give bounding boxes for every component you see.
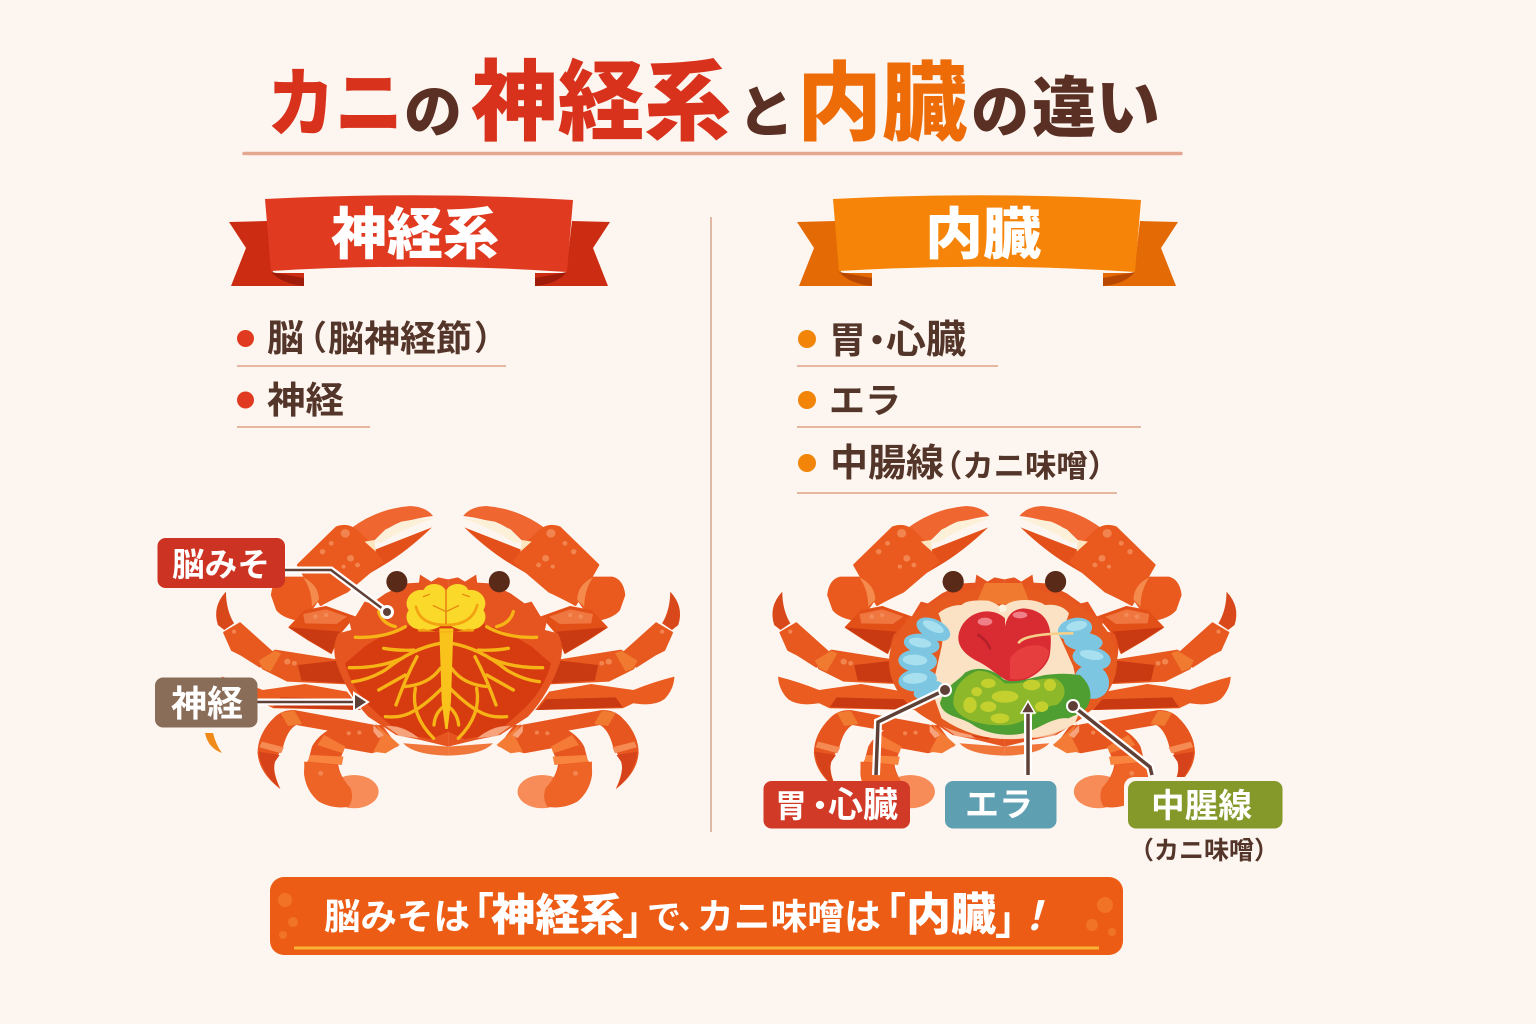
title: カニ: [267, 62, 403, 146]
bottom callout banner: 」: [622, 899, 662, 943]
list: internal organs: ・: [859, 320, 895, 361]
label: stomach and heart with leader: [764, 684, 951, 828]
panel heading: internal organs ribbon: 内臓: [925, 203, 1041, 266]
list: internal organs: （カニ味噌）: [931, 449, 1119, 484]
eyes: [943, 571, 1066, 592]
bottom callout banner: ！: [1014, 895, 1054, 939]
list: internal organs: 胃: [829, 320, 866, 361]
bottom callout banner: [270, 877, 1123, 955]
title underline: [244, 152, 1181, 155]
carapace rim: [889, 586, 1117, 738]
title: の: [971, 80, 1029, 145]
list: nervous system: 脳神経節: [328, 318, 472, 359]
label: nerves with arrow: 神経: [171, 683, 243, 724]
cream inner body: [932, 600, 1082, 739]
label: stomach and heart with leader: 胃: [775, 788, 807, 824]
bottom callout banner: 「: [866, 891, 906, 935]
brain: [412, 618, 480, 632]
list: internal organs: 心臓: [886, 319, 966, 362]
list: nervous system: 脳: [267, 318, 304, 359]
bottom callout banner: 「: [454, 891, 494, 935]
list: internal organs: [797, 319, 1141, 493]
list: nervous system: （: [293, 320, 327, 358]
label: brain miso with leader: [158, 538, 394, 619]
bottom callout banner: 神経系: [491, 891, 624, 940]
title: [267, 53, 1160, 152]
label: nerves with arrow: [155, 678, 368, 728]
panel heading: nervous system ribbon: 神経系: [331, 203, 499, 266]
list: internal organs: エラ: [829, 382, 901, 421]
panel heading: nervous system ribbon: [229, 195, 610, 286]
bottom callout banner: カニ味噌は: [697, 896, 881, 937]
label: midgut gland with leader: （カニ味噌）: [1129, 837, 1279, 865]
center divider: [710, 217, 712, 832]
title: 内臓: [797, 56, 967, 152]
list: nervous system: [237, 318, 508, 427]
nerves: [349, 584, 543, 738]
list: nervous system: ）: [474, 320, 508, 358]
label: stomach and heart with leader: ・: [804, 788, 836, 824]
gill highlights: [902, 618, 1104, 685]
bottom callout banner: 脳みそは: [324, 896, 470, 937]
bottom callout banner: 、: [678, 903, 708, 936]
list: nervous system: 神経: [267, 380, 344, 421]
bottom callout banner: で: [647, 899, 681, 937]
label: gills with arrow: エラ: [965, 786, 1033, 823]
panel heading: internal organs ribbon: [797, 195, 1178, 286]
title: と: [738, 81, 794, 144]
label: midgut gland with leader: [1067, 700, 1287, 865]
small orange fragment: [205, 733, 222, 753]
label: stomach and heart with leader: 心臓: [828, 786, 898, 825]
heart and stomach: [958, 608, 1051, 682]
illustration: crab with internal organs: [772, 506, 1236, 808]
label: brain miso with leader: 脳みそ: [172, 546, 270, 583]
gills: [897, 613, 1116, 706]
label: midgut gland with leader: 中腥線: [1151, 787, 1252, 824]
title: 神経系: [471, 53, 731, 152]
crab body left: [216, 506, 680, 808]
list: internal organs: 中腸線: [830, 443, 944, 485]
bottom callout banner: 」: [995, 899, 1035, 943]
crab body right: [772, 506, 1236, 808]
bottom callout banner: 内臓: [906, 889, 996, 940]
label: gills with arrow: [945, 701, 1056, 828]
title: の: [404, 80, 462, 145]
title: 違い: [1032, 71, 1160, 145]
illustration: crab with nervous system: [216, 506, 680, 808]
green midgut gland: [940, 669, 1090, 735]
